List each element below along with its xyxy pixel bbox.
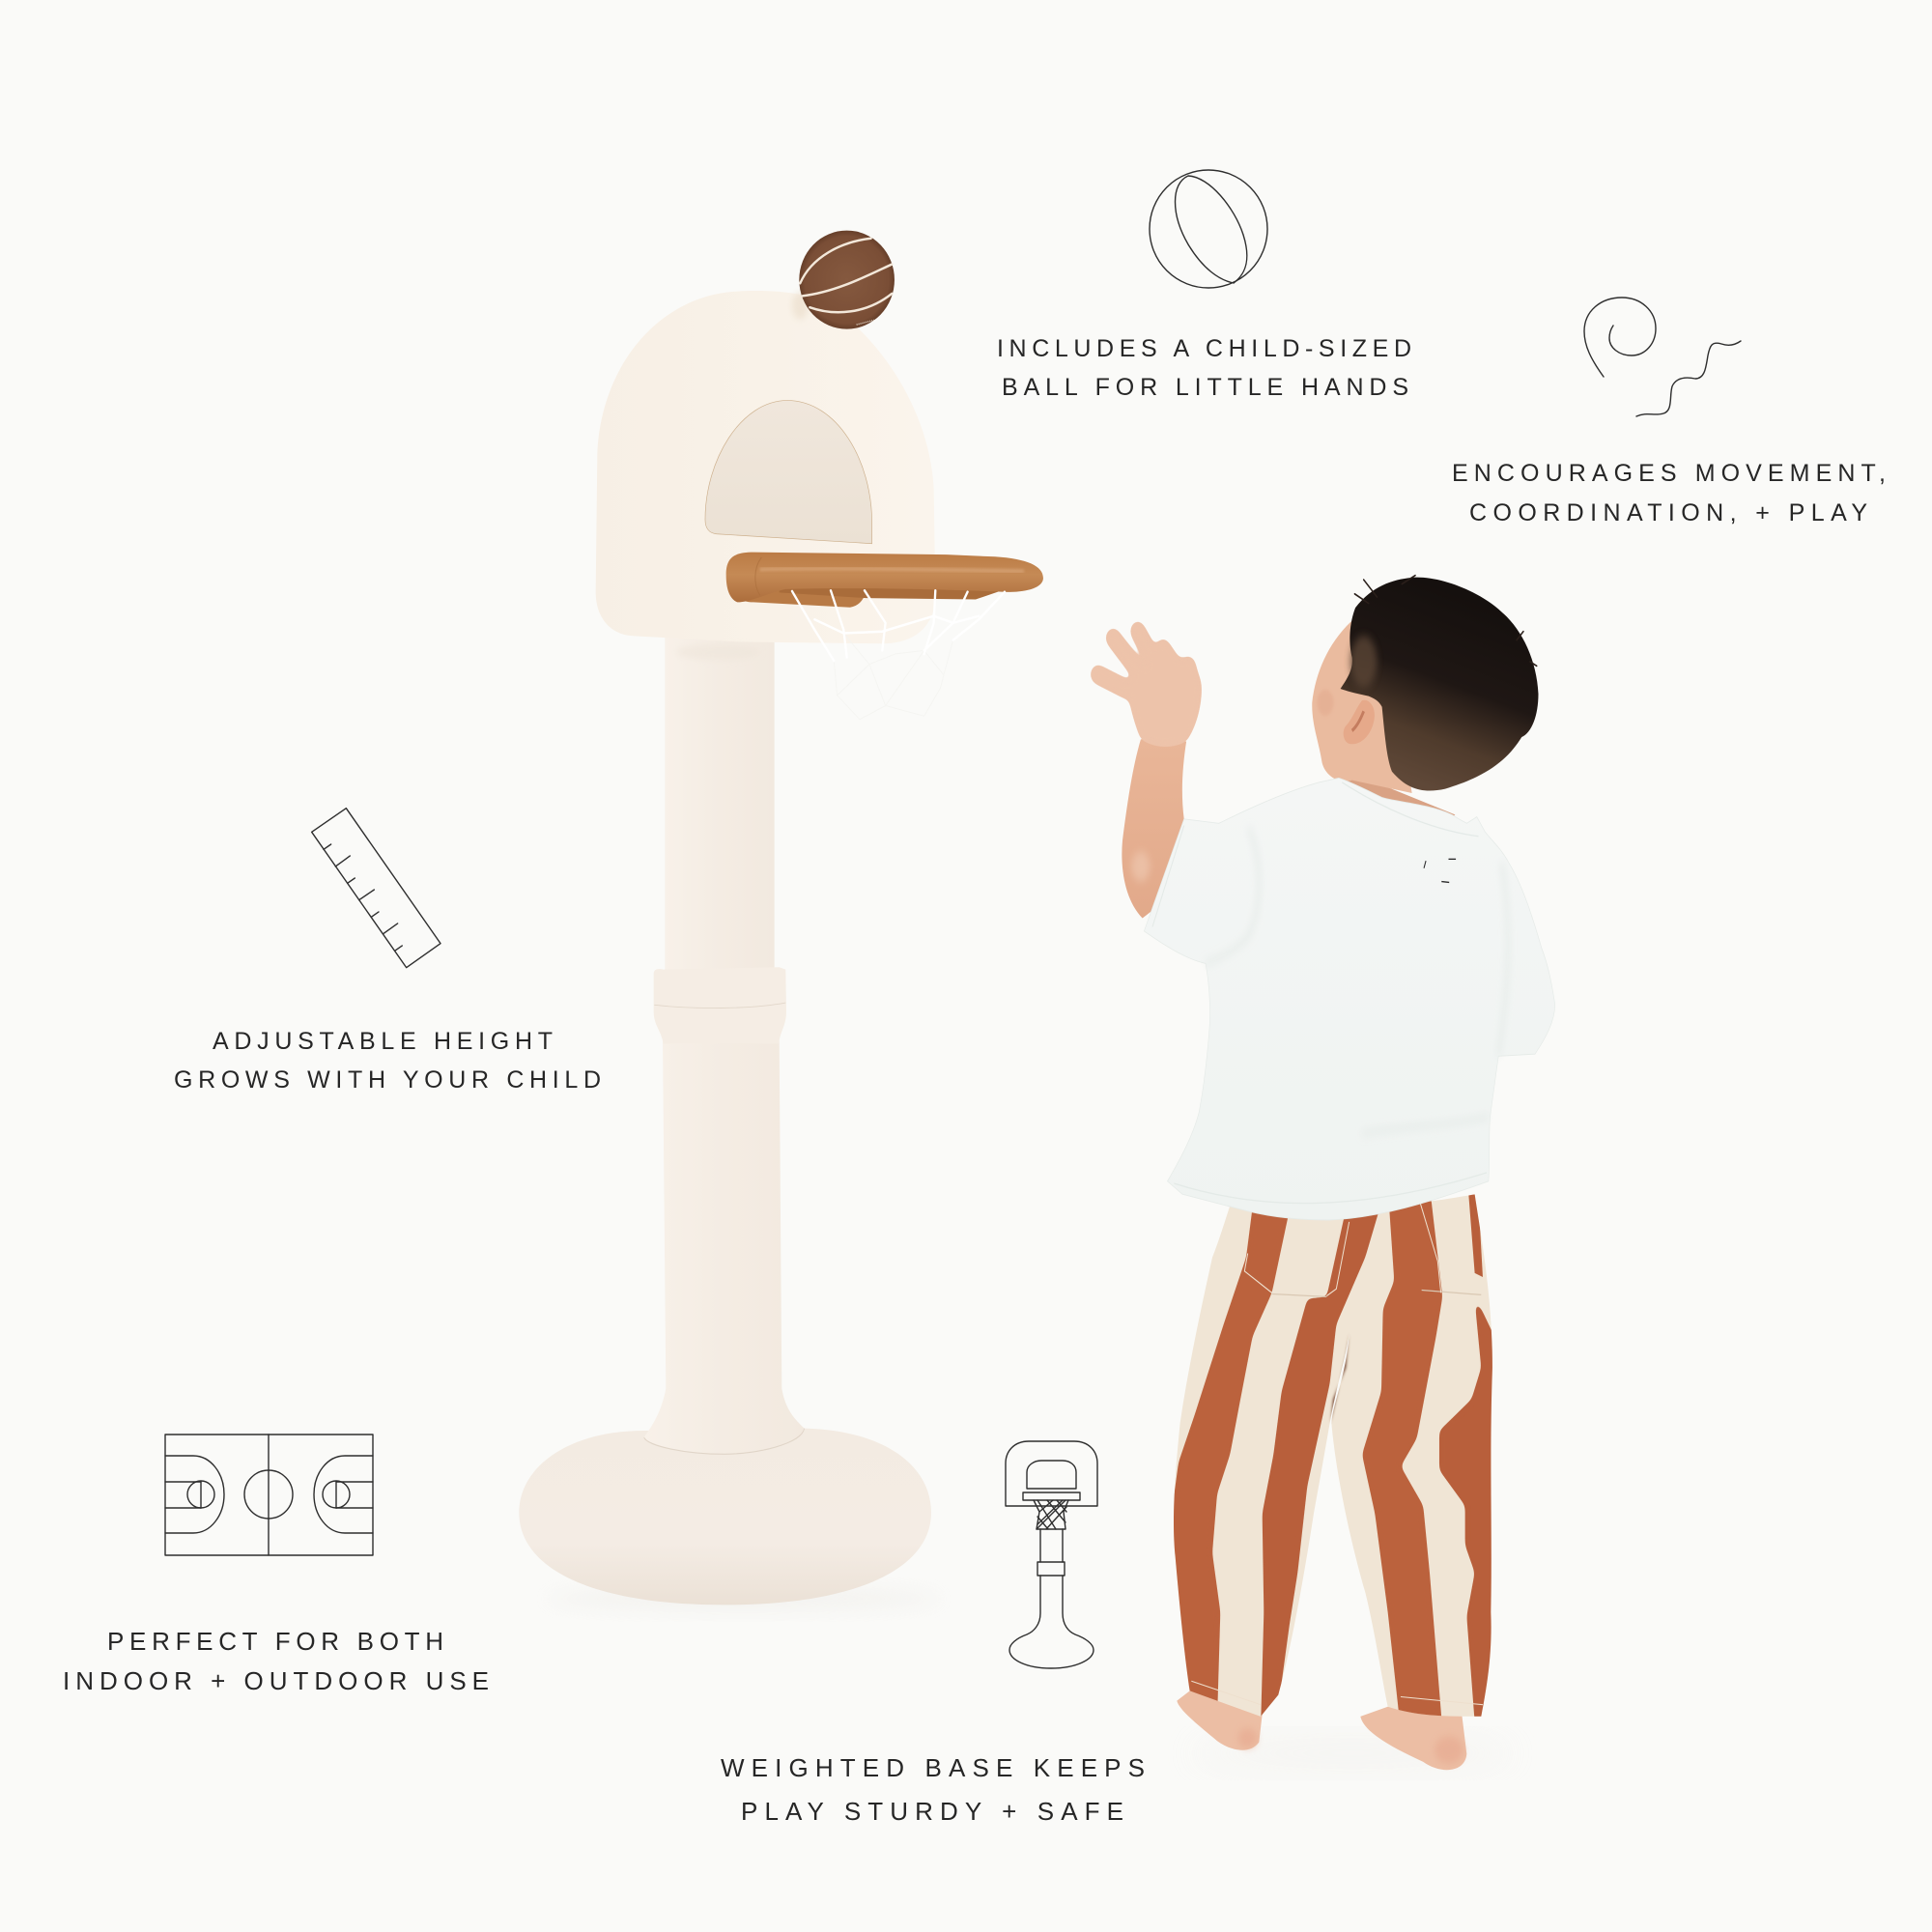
striped pants (1174, 1194, 1492, 1717)
lower pole (644, 1034, 805, 1454)
icon: basketball court (165, 1435, 373, 1555)
icon: spiral and squiggle (1584, 298, 1741, 416)
text: indoor and outdoor: INDOOR + OUTDOOR USE (63, 1666, 489, 1695)
pocket stitching (1191, 1202, 1483, 1705)
ear (1344, 700, 1375, 744)
rim bracket (727, 578, 867, 608)
hand (1098, 631, 1202, 747)
feet (1177, 1690, 1466, 1770)
text: indoor and outdoor: PERFECT FOR BOTH (107, 1627, 443, 1656)
stripe 3 (1362, 1186, 1442, 1730)
arm (1122, 739, 1186, 919)
text: indoor and outdoor (63, 1627, 489, 1695)
t-shirt (1144, 778, 1555, 1220)
hair (1341, 578, 1538, 791)
crotch shadow (1330, 1334, 1350, 1423)
backboard inner panel (705, 401, 872, 544)
arm and hand (1098, 631, 1202, 919)
text: encourages movement: ENCOURAGES MOVEMENT, (1452, 460, 1886, 487)
text: adjustable height (174, 1028, 601, 1094)
rim (726, 553, 1043, 602)
text: adjustable height: GROWS WITH YOUR CHILD (174, 1066, 601, 1094)
text: child-sized ball (997, 335, 1411, 401)
text: weighted base: PLAY STURDY + SAFE (741, 1797, 1123, 1826)
text: adjustable height: ADJUSTABLE HEIGHT (213, 1028, 553, 1055)
text: child-sized ball: INCLUDES A CHILD-SIZED (997, 335, 1411, 362)
icon: ball (1150, 170, 1267, 288)
face (1312, 620, 1412, 793)
upper pole (665, 638, 775, 976)
text: weighted base: WEIGHTED BASE KEEPS (721, 1753, 1145, 1782)
text: weighted base (721, 1753, 1145, 1826)
head (1312, 576, 1538, 837)
shirt stitch marks (1424, 859, 1456, 882)
text: encourages movement: COORDINATION, + PLAY (1469, 499, 1867, 526)
basketball (799, 231, 895, 329)
child playing (1098, 576, 1555, 1770)
text: encourages movement (1452, 460, 1886, 526)
product: basketball hoop (519, 231, 1043, 1605)
icon: ruler (312, 809, 440, 968)
weighted base (519, 1429, 931, 1605)
stripe 2 (1261, 1214, 1378, 1716)
net (792, 590, 1005, 720)
backboard and rim (596, 231, 1043, 720)
floor shadows (546, 1587, 1517, 1767)
height collar (654, 967, 786, 1043)
text: child-sized ball: BALL FOR LITTLE HANDS (1002, 374, 1408, 401)
hoop stand: pole, collar and weighted base (519, 638, 931, 1605)
backboard (596, 291, 935, 643)
stripe 1 (1174, 1212, 1288, 1701)
stripe 4 (1439, 1306, 1492, 1717)
neck (1335, 767, 1455, 837)
icon: hoop outline (1006, 1441, 1097, 1668)
